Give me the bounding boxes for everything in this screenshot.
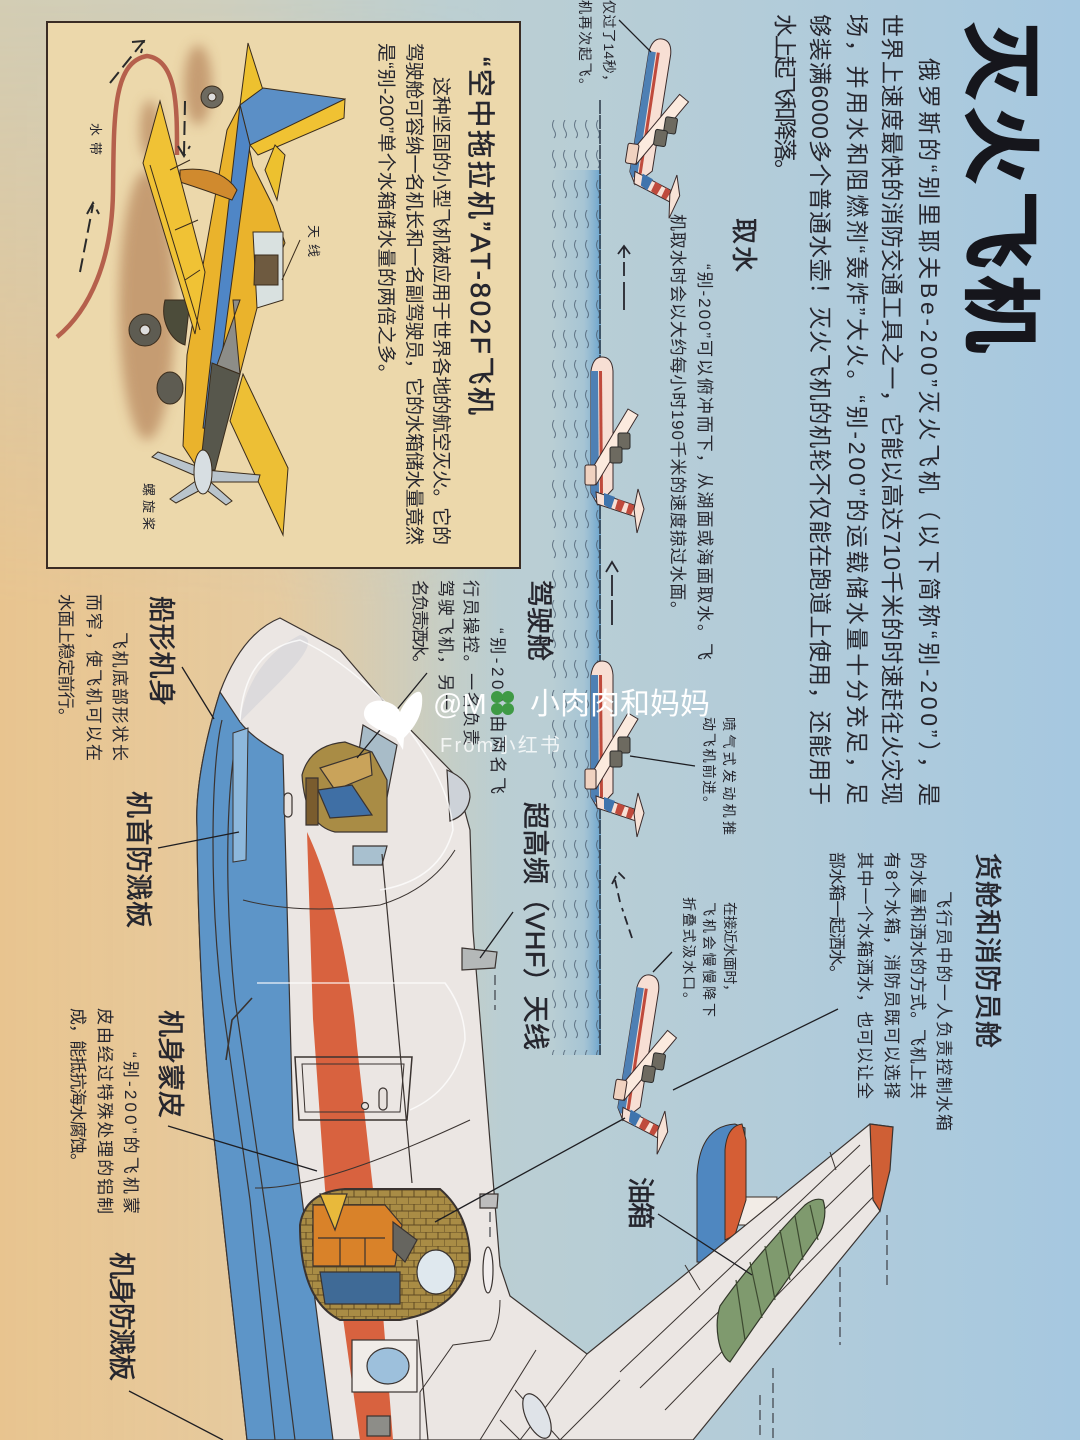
engine pod xyxy=(517,1390,557,1440)
embossed flap lines xyxy=(240,640,465,1110)
side window xyxy=(353,846,387,865)
note: jet engines: 喷气式发动机推 xyxy=(721,717,737,835)
rear antenna xyxy=(480,1194,498,1208)
label: VHF antenna: 超高频（VHF）天线 xyxy=(520,802,550,1050)
watermark handle: 小肉肉和妈妈 xyxy=(530,688,710,721)
cargo cabin text: 飞行员中的一人负责控制水箱 xyxy=(934,891,953,1131)
intro paragraph: 俄罗斯的“别里耶夫Be-200”灭火飞机（以下简称“别-200”），是 xyxy=(916,58,942,806)
intro paragraph: 世界上速度最快的消防交通工具之一，它能以高达710千米的时速赶往火灾现 xyxy=(879,14,905,805)
cockpit cutaway xyxy=(302,742,387,832)
label: hose: 水带 xyxy=(88,123,103,155)
wing tip xyxy=(870,1124,893,1211)
water scooping text: “别-200”可以俯冲而下，从湖面或海面取水。飞 xyxy=(695,264,714,660)
panel: AT-802F air tractor xyxy=(47,22,520,568)
panel text: 驾驶舱可容纳一名机长和一名副驾驶员，它的水箱储水量竟然 xyxy=(403,43,425,545)
boat hull text: 而窄，使飞机可以在 xyxy=(84,594,104,761)
icon: yellow plane xyxy=(129,43,345,535)
panel text: 这种坚固的小型飞机被应用于世界各地的航空灭火。它的 xyxy=(430,77,452,545)
intro paragraph: 场，并用水和阻燃剂“轰炸”大火。“别-200”的运载储水量十分充足，足 xyxy=(844,14,870,805)
watermark handle xyxy=(433,688,710,757)
blue lower hull xyxy=(197,692,333,1440)
plane: scooping second xyxy=(585,661,644,837)
heading: water scooping: 取水 xyxy=(729,218,759,272)
plane: climbing after scoop xyxy=(618,36,703,219)
panel text: 是“别-200”单个水箱储水量的两倍之多。 xyxy=(375,43,397,383)
note: take off again: 仅过了14秒， xyxy=(601,0,617,88)
label: bow spray rail: 机首防溅板 xyxy=(123,791,153,928)
plane: scooping first xyxy=(585,357,644,533)
cargo cabin text: 其中一个水箱洒水，也可以让全 xyxy=(855,852,874,1099)
cargo door xyxy=(295,1057,412,1120)
fuel tank xyxy=(717,1199,825,1362)
note: jet engines xyxy=(701,717,737,835)
red stripe xyxy=(307,832,393,1440)
cockpit text: 驾驶飞机，另一 xyxy=(436,580,455,710)
hose xyxy=(57,56,177,337)
cockpit text: 行员操控。一名负责 xyxy=(461,580,480,746)
cockpit text: “别-200”由两名飞 xyxy=(488,628,507,794)
label: skin: 机身蒙皮 xyxy=(155,1010,185,1118)
cargo cabin text xyxy=(827,852,953,1131)
cockpit text: 名负责洒水。 xyxy=(410,580,429,672)
panel text xyxy=(375,43,452,545)
intro paragraph: 够装满6000多个普通水壶！灭火飞机的机轮不仅能在跑道上使用，还能用于 xyxy=(807,14,833,805)
skin text: “别-200”的飞机蒙 xyxy=(121,1052,140,1214)
note: take off again xyxy=(577,0,617,92)
note: approaching water xyxy=(681,897,738,1017)
boat hull text xyxy=(56,594,129,761)
note: approaching water: 在接近水面时， xyxy=(722,902,738,998)
nose cap xyxy=(240,635,308,722)
water scooping text: 机取水时会以大约每小时190千米的速度掠过水面。 xyxy=(668,214,687,618)
watermark xyxy=(364,688,710,757)
boat hull text: 飞机底部形状长 xyxy=(110,632,129,761)
plane: approaching xyxy=(606,972,691,1155)
label: fuselage spray rail: 机身防溅板 xyxy=(106,1252,136,1381)
note: jet engines: 动飞机前进。 xyxy=(701,717,717,810)
watermark handle: From小红书 xyxy=(440,734,560,757)
watermark handle: @M xyxy=(433,689,487,721)
cargo cabin text: 部水箱一起洒水。 xyxy=(827,852,846,982)
cargo cabin text: 有8个水箱，消防员既可以选择 xyxy=(882,852,901,1099)
label: antenna: 天线 xyxy=(306,225,321,257)
heading: cockpit: 驾驶舱 xyxy=(524,580,554,661)
flight arrows xyxy=(606,246,632,938)
cockpit window xyxy=(353,725,397,808)
wing streaks xyxy=(490,975,887,1440)
note: approaching water: 飞机会慢慢降下 xyxy=(701,902,717,1017)
heading: cargo and firefighter cabin: 货舱和消防员舱 xyxy=(972,853,1002,1048)
boat hull text: 水面上稳定前行。 xyxy=(56,594,75,725)
cargo cabin text: 的水量和洒水的方式。飞机上共 xyxy=(908,852,927,1099)
wing surfaces xyxy=(420,1145,875,1440)
tail float xyxy=(697,1124,777,1262)
leader lines xyxy=(129,20,838,1440)
water scooping text xyxy=(668,214,714,660)
intro paragraph xyxy=(772,14,942,806)
title: 灭火飞机 xyxy=(956,22,1044,353)
hull lines xyxy=(213,720,470,1440)
cockpit text xyxy=(410,580,507,794)
label: propeller: 螺旋桨 xyxy=(141,483,156,530)
VHF antenna xyxy=(462,948,497,970)
icon: white heart xyxy=(364,692,422,750)
nose hatch xyxy=(284,793,292,817)
windows xyxy=(352,1247,493,1436)
illustration: Be-200 fuselage and wing xyxy=(197,618,893,1440)
skin text xyxy=(68,1008,140,1214)
flow arrows xyxy=(80,41,190,272)
skin text: 成，能抵抗海水腐蚀。 xyxy=(68,1008,87,1170)
note: approaching water: 折叠式汲水口。 xyxy=(681,897,697,1006)
rear cabin cutaway xyxy=(300,1189,470,1320)
ground dirt xyxy=(119,45,212,440)
radome bump xyxy=(447,770,470,821)
label: boat hull: 船形机身 xyxy=(146,596,176,706)
label: fuel tank: 油箱 xyxy=(625,1177,655,1229)
panel heading: “空中拖拉机”AT-802F飞机 xyxy=(465,57,496,415)
skin text: 皮由经过特殊处理的铝制 xyxy=(95,1008,114,1214)
note: take off again: 机再次起飞。 xyxy=(577,0,593,92)
water strip with waves xyxy=(552,100,601,1055)
intro paragraph: 水上起飞和降落。 xyxy=(772,14,798,182)
